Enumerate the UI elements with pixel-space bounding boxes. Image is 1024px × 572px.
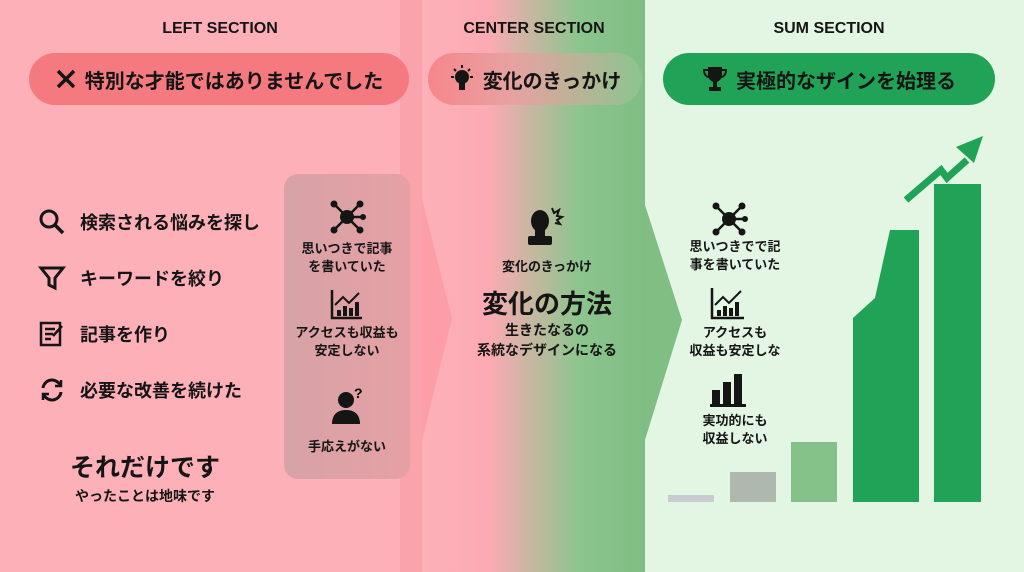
text: item 2: アクセスも xyxy=(703,325,767,340)
text: item 1: 事を書いていた xyxy=(690,257,780,272)
text: item 1 xyxy=(689,239,780,272)
text: method desc xyxy=(477,322,617,358)
icon: bars xyxy=(710,374,746,407)
text: trigger: 変化のきっかけ xyxy=(502,259,592,274)
text: item 1: 思いつきでで記 xyxy=(689,239,780,254)
panel: problems xyxy=(284,174,410,479)
text: conclusion xyxy=(70,454,220,504)
text: item 2: 収益も安定しな xyxy=(689,343,780,358)
panel: center content xyxy=(477,208,617,358)
icon: chart xyxy=(710,288,744,320)
text: problem 1: 思いつきで記事 xyxy=(301,241,392,256)
text: method title: 変化の方法 xyxy=(482,289,612,319)
icon: confused person xyxy=(332,386,363,424)
heading: left section: LEFT SECTION xyxy=(162,20,278,37)
text: problem 1 xyxy=(301,241,392,274)
pill: sum xyxy=(663,53,995,105)
pill: center xyxy=(428,53,642,105)
text: item 3 xyxy=(702,413,768,446)
list: steps xyxy=(38,210,260,402)
text: conclusion: やったことは地味です xyxy=(75,488,215,504)
heading: sum section: SUM SECTION xyxy=(773,20,885,37)
item: search xyxy=(40,210,260,234)
arrow: growth xyxy=(906,136,983,200)
pill: sum: 実極的なザインを始理る xyxy=(736,70,956,92)
pill: left xyxy=(29,53,409,105)
item: filter: キーワードを絞り xyxy=(80,269,224,289)
heading: center section: CENTER SECTION xyxy=(463,20,605,37)
icon: network xyxy=(712,202,748,236)
text: problem 2 xyxy=(295,325,399,358)
icon: person spark xyxy=(528,208,565,245)
text: conclusion: それだけです xyxy=(70,454,220,482)
text: item 3: 収益しない xyxy=(702,431,768,446)
pill: left: 特別な才能ではありませんでした xyxy=(85,70,383,92)
text: item 3: 実功的にも xyxy=(702,413,768,428)
text: item 2 xyxy=(689,325,780,358)
text: problem 2: アクセスも収益も xyxy=(295,325,399,340)
text: problem 1: を書いていた xyxy=(308,259,386,274)
icon: network xyxy=(330,200,366,234)
chart: growth bars xyxy=(668,136,983,502)
icon: chart xyxy=(330,290,362,320)
item: search: 検索される悩みを探し xyxy=(80,213,260,233)
item: improve: 必要な改善を続けた xyxy=(80,381,242,401)
item: article: 記事を作り xyxy=(80,325,170,345)
panel: sum list xyxy=(689,202,780,446)
item: article xyxy=(40,322,170,346)
text: method desc: 生きたなるの xyxy=(505,322,589,338)
item: filter xyxy=(38,266,224,290)
text: problem 2: 安定しない xyxy=(314,343,380,358)
text: problem 3: 手応えがない xyxy=(308,439,386,454)
pill: center: 変化のきっかけ xyxy=(483,70,621,92)
text: method desc: 系統なデザインになる xyxy=(477,342,617,358)
